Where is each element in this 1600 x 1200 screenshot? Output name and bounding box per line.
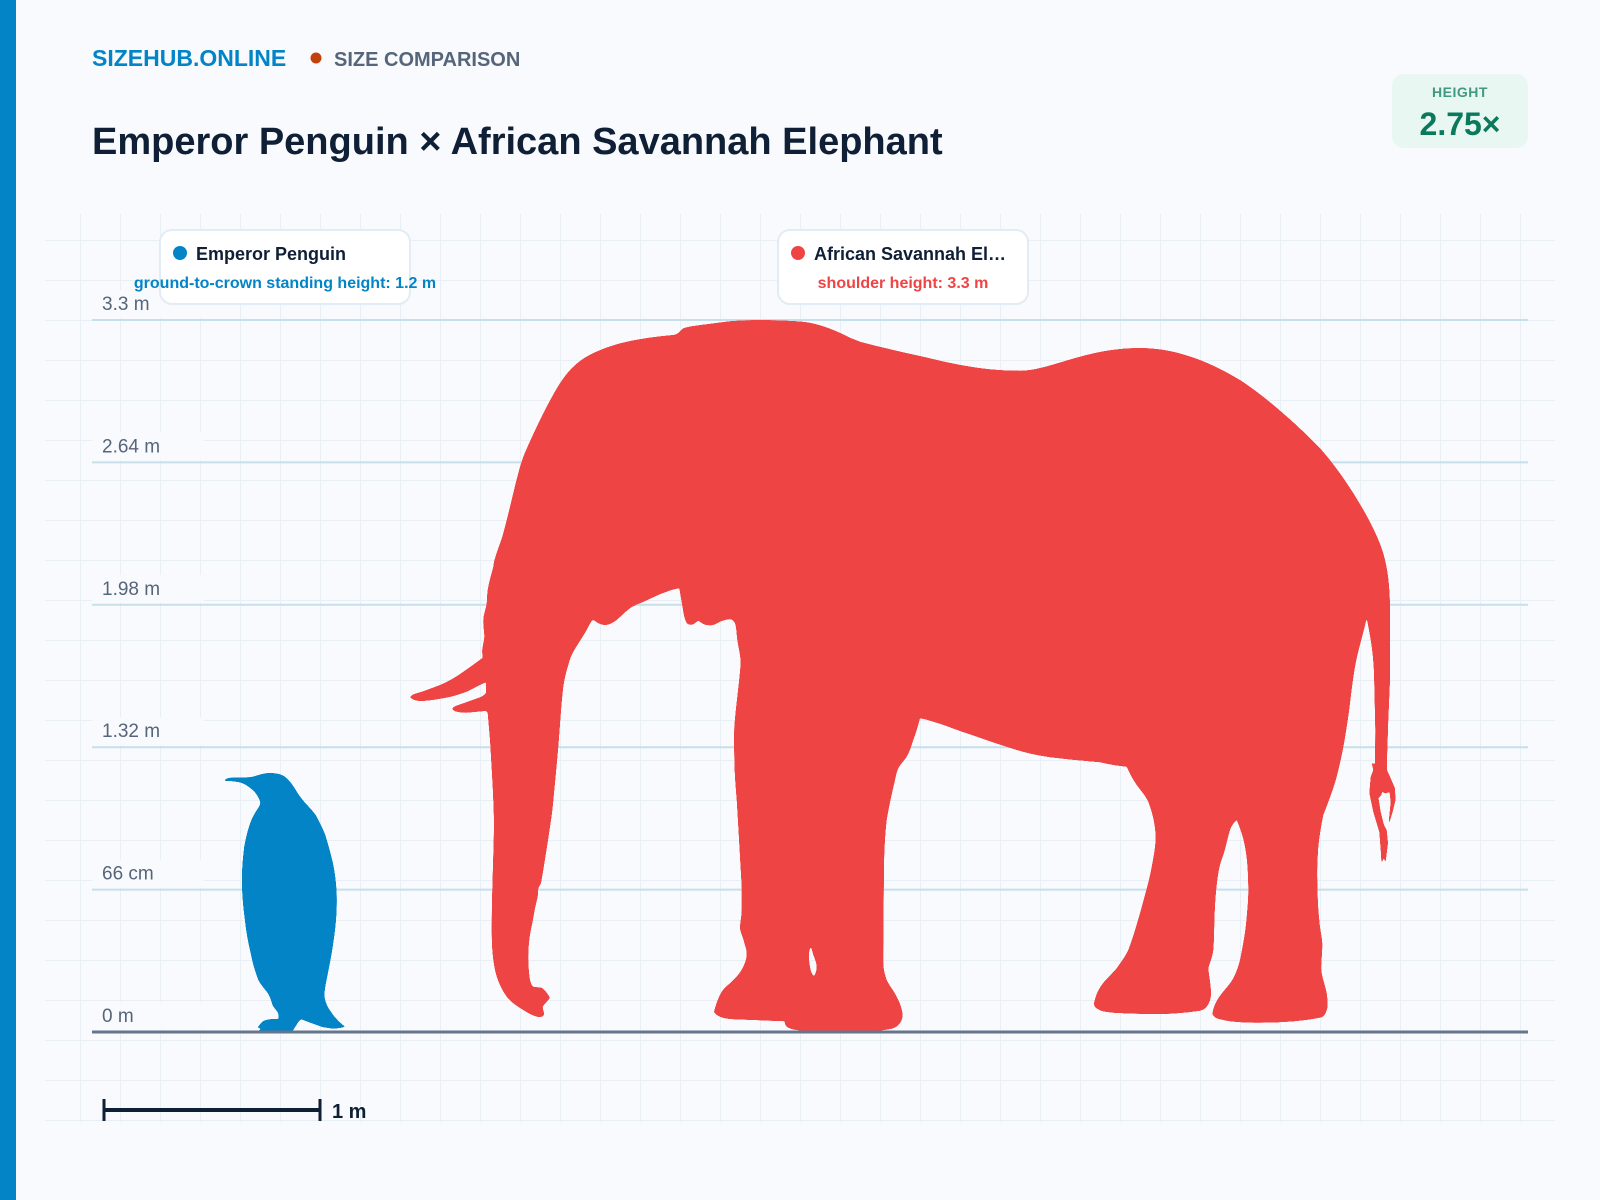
label card: emperor penguin: ground-to-crown standing height: 1.2 m bbox=[134, 275, 436, 292]
title: Emperor Penguin × African Savannah Elephant bbox=[92, 121, 943, 163]
scale bar: 1 m bbox=[104, 1099, 366, 1123]
eyebrow label: SIZE COMPARISON bbox=[334, 49, 520, 71]
height axis reference lines and labels: 1.98 m bbox=[102, 579, 160, 600]
height axis reference lines and labels: 66 cm bbox=[102, 864, 154, 885]
height axis reference lines and labels: 3.3 m bbox=[102, 294, 150, 315]
label card: emperor penguin bbox=[134, 230, 436, 304]
label card: african savannah elephant: shoulder height: 3.3 m bbox=[818, 275, 988, 292]
height axis reference lines and labels: 2.64 m bbox=[102, 436, 160, 457]
silhouette: emperor penguin bbox=[224, 773, 345, 1032]
silhouette: african savannah elephant bbox=[410, 320, 1396, 1032]
height ratio badge bbox=[1392, 74, 1528, 148]
height ratio badge: 2.75× bbox=[1420, 106, 1500, 142]
scale bar: 1 m: 1 m bbox=[332, 1101, 366, 1123]
ground line bbox=[92, 1030, 1528, 1034]
height ratio badge: HEIGHT bbox=[1432, 84, 1488, 100]
label card: african savannah elephant bbox=[778, 230, 1028, 304]
height axis reference lines and labels: 0 m bbox=[102, 1006, 134, 1027]
label card: emperor penguin: Emperor Penguin bbox=[196, 244, 346, 264]
brand name: SIZEHUB.ONLINE bbox=[92, 45, 286, 71]
brand separator dot bbox=[310, 52, 322, 64]
height axis reference lines and labels bbox=[92, 290, 1528, 1030]
height axis reference lines and labels: 1.32 m bbox=[102, 721, 160, 742]
label card: african savannah elephant: African Savannah El… bbox=[814, 244, 1006, 264]
accent stripe bbox=[0, 0, 16, 1200]
